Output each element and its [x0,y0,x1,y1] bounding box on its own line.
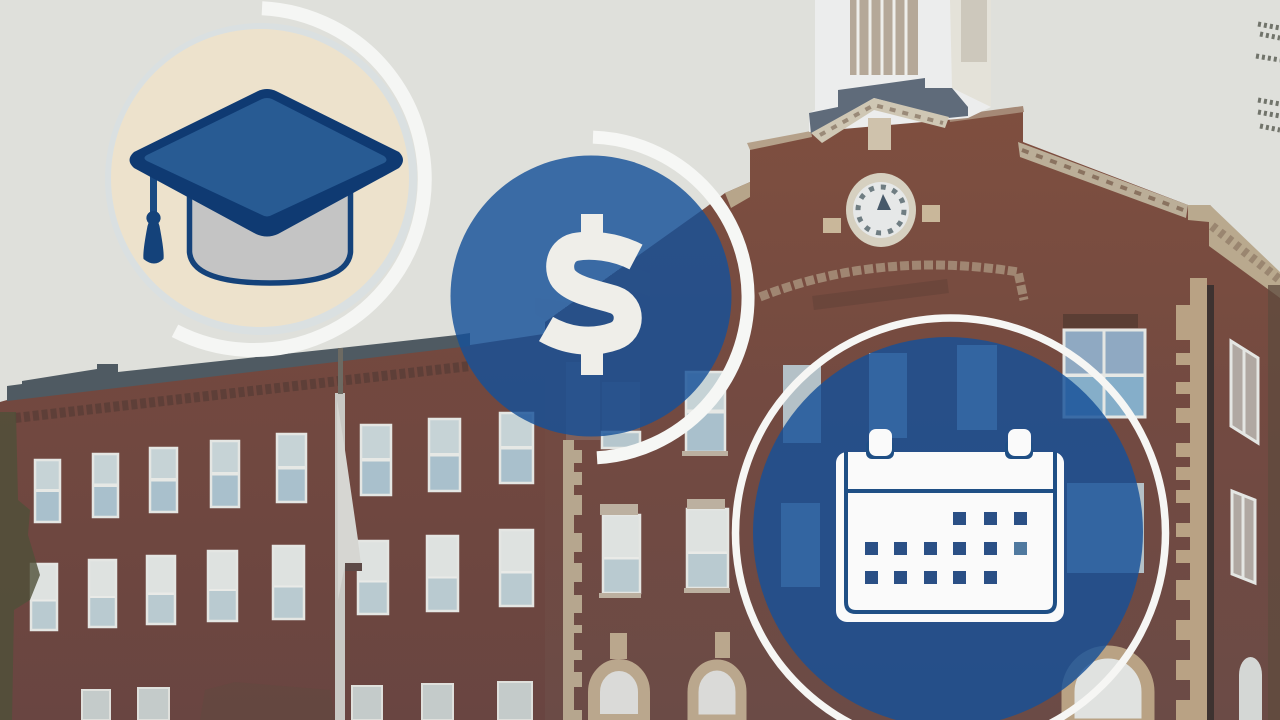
tassel [143,211,164,264]
left stepped cornice [725,182,750,208]
pediment trim [811,98,949,143]
tassel cord [150,176,157,220]
cap board face [144,98,386,216]
pole finial [338,348,343,394]
tower slate band [809,78,968,134]
right wing windows [1064,330,1258,583]
blue disc [753,337,1143,720]
far right pillar [1268,285,1280,720]
calendar outer [836,452,1064,622]
faint windows under dollar disc [566,362,640,440]
left wing upper windows [35,413,533,522]
post cap [345,563,362,571]
right wing brick [545,98,1280,720]
centre wing windows [602,372,728,593]
calendar header rule [848,489,1053,493]
dollar body curve [546,246,636,341]
windows under calendar disc [781,345,1144,587]
stone quoins centre [563,440,582,720]
stone quoins right [1176,278,1207,720]
dollar bars [581,214,603,375]
cap base [190,190,350,283]
arched doors [594,632,1262,720]
blue disc [450,156,732,436]
side louvres [961,0,987,62]
icon: calendar in blue circle [736,318,1166,720]
icon: dollar in blue circle [450,137,748,458]
tower side face [950,0,991,107]
white ring [736,318,1166,720]
ground shrubs [200,682,335,720]
downpipe [1207,285,1214,720]
left wing roof [7,333,470,401]
window hoods and sills [599,451,730,598]
belfry louvres [850,0,918,75]
icon: graduation cap in cream circle [105,8,425,350]
clock [846,173,916,247]
window lintel [1063,314,1138,328]
cap board [130,89,403,236]
stone plaques [868,118,891,150]
cream disc [111,29,409,327]
dentil cornice [1018,142,1188,218]
tree left [0,412,40,720]
flag [337,400,361,600]
halo ring [105,23,417,335]
calendar frame line [846,452,1055,612]
left wing cornice [15,366,470,418]
left wing brick [0,330,570,720]
parapet caps [747,131,812,150]
clock tower [809,0,991,132]
dollar upper counter [570,256,650,296]
calendar day squares [865,512,1027,584]
ring shadows [866,440,1033,459]
dollar lower counter [535,298,620,332]
corner cornice [1188,205,1280,298]
dollar sign: $ [548,209,636,377]
left wing lower windows [31,530,533,630]
white progress ring [175,8,425,350]
flag pole [335,393,345,720]
left wing ground windows [82,682,532,720]
calendar rings [869,429,1031,456]
brick arch ornament [760,265,1024,300]
tree right [1256,24,1280,130]
white progress ring [593,137,748,458]
